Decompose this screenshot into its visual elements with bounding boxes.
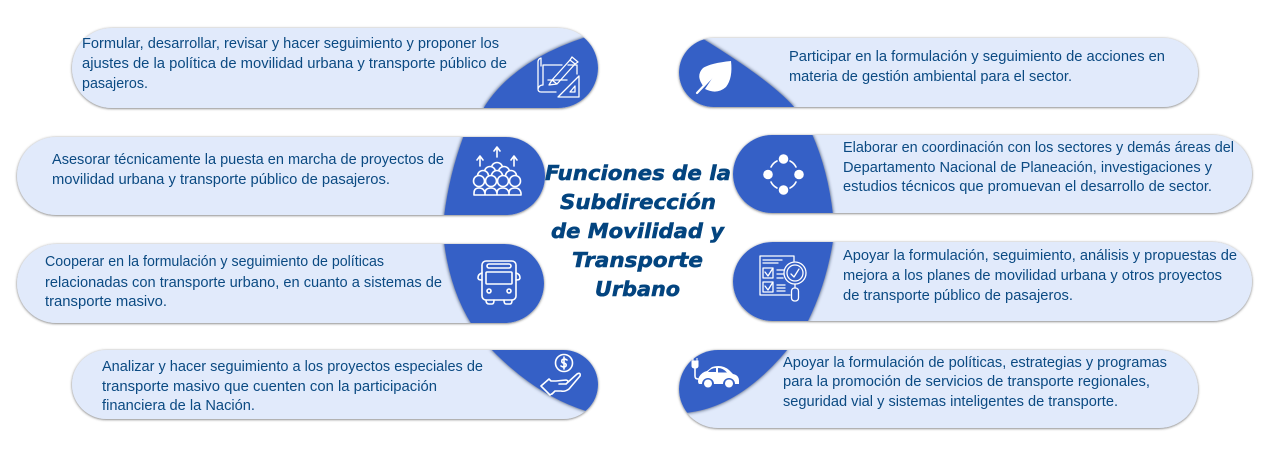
title: Urbano: [595, 277, 680, 301]
text: formular: pasajeros.: [82, 76, 148, 92]
icon: electric car: [692, 358, 739, 388]
icon: leaf: [697, 61, 731, 93]
text: analizar: transporte masivo que cuenten con la participación: [102, 379, 437, 395]
text: analizar: financiera de la Nación.: [102, 398, 255, 414]
panel: analizar: [72, 348, 602, 419]
text: apoyar planes: Apoyar la formulación, seguimiento, análisis y propuestas de: [843, 248, 1237, 264]
title: de Movilidad y: [551, 219, 726, 243]
text: participar: materia de gestión ambiental para el sector.: [789, 69, 1072, 85]
text: cooperar: [45, 254, 442, 310]
icon: plan with pencil and set square: [538, 57, 579, 97]
icon: bus: [478, 261, 520, 304]
panel: apoyar políticas: [675, 349, 1198, 428]
title: Transporte: [572, 248, 703, 272]
icon: hand with coin: [541, 354, 580, 395]
text: asesorar: movilidad urbana y transporte público de pasajeros.: [52, 172, 390, 188]
text: formular: ajustes de la política de movilidad urbana y transporte público de: [82, 56, 507, 72]
text: elaborar: estudios técnicos que promuevan el desarrollo de sector.: [843, 179, 1212, 195]
panel: apoyar planes: [730, 241, 1252, 323]
text: elaborar: [843, 140, 1234, 195]
text: apoyar planes: mejora a los planes de movilidad urbana y otros proyectos: [843, 268, 1222, 284]
panel: cooperar: [17, 242, 550, 325]
text: analizar: Analizar y hacer seguimiento a los proyectos especiales de: [102, 359, 483, 375]
panel: asesorar técnicamente: [17, 135, 550, 217]
text: apoyar planes: [843, 248, 1237, 304]
text: apoyar políticas: para la promoción de servicios de transporte regionales,: [783, 374, 1150, 390]
icon: checklist with magnifier: [760, 256, 806, 301]
panel: formular y desarrollar política: [72, 20, 600, 110]
title: Subdirección: [560, 190, 716, 214]
text: participar: Participar en la formulación y seguimiento de acciones en: [789, 49, 1165, 65]
text: cooperar: transporte masivo.: [45, 294, 167, 310]
panel: gestión ambiental: [675, 37, 1198, 108]
title: [545, 161, 731, 301]
text: elaborar: Elaborar en coordinación con los sectores y demás áreas del: [843, 140, 1234, 156]
icon: circular nodes: [763, 154, 804, 195]
text: apoyar planes: de transporte público de pasajeros.: [843, 288, 1073, 304]
text: cooperar: Cooperar en la formulación y seguimiento de políticas: [45, 254, 384, 270]
text: formular: Formular, desarrollar, revisar y hacer seguimiento y proponer los: [82, 36, 499, 52]
text: cooperar: relacionadas con transporte urbano, en cuanto a sistemas de: [45, 275, 442, 291]
text: participar: [789, 49, 1165, 85]
title: Funciones de la: [545, 161, 731, 185]
text: analizar: [102, 359, 483, 414]
panel: elaborar: [730, 134, 1252, 215]
text: asesorar: Asesorar técnicamente la puesta en marcha de proyectos de: [52, 152, 444, 168]
text: elaborar: Departamento Nacional de Planeación, investigaciones y: [843, 160, 1213, 176]
text: asesorar: [52, 152, 444, 188]
text: apoyar políticas: [783, 355, 1167, 410]
text: apoyar políticas: seguridad vial y sistemas inteligentes de transporte.: [783, 394, 1118, 410]
text: apoyar políticas: Apoyar la formulación de políticas, estrategias y programas: [783, 355, 1167, 371]
text: formular: [82, 36, 507, 92]
icon: group of people with arrows: [474, 147, 521, 195]
